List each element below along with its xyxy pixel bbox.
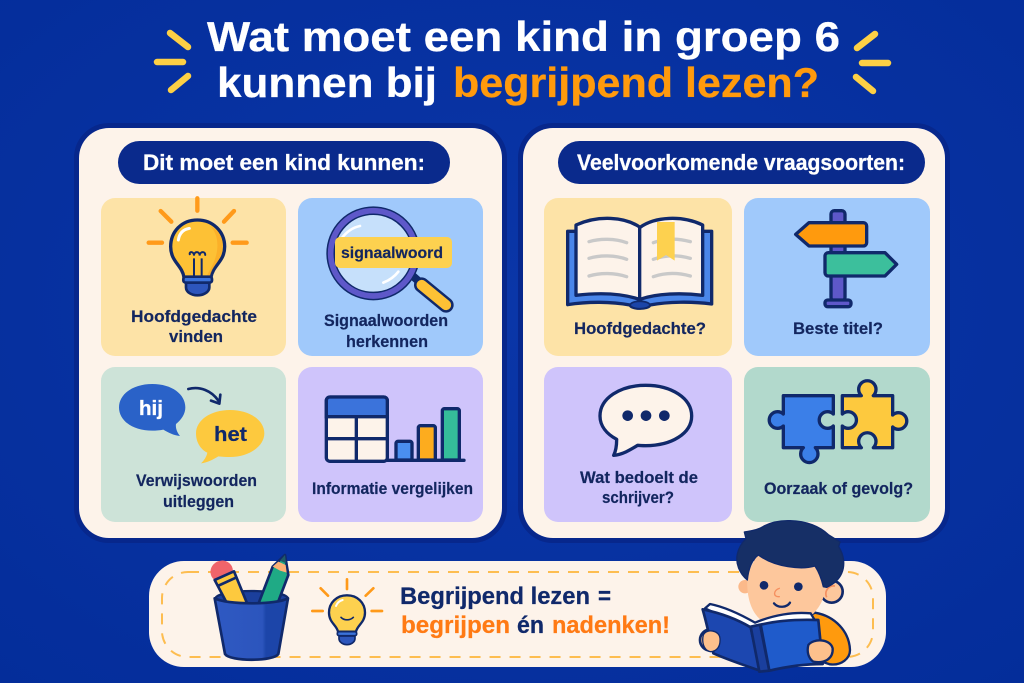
banner: begrijpend lezen bbox=[149, 521, 886, 672]
heading: dit moet een kind kunnen bbox=[118, 141, 450, 184]
card: verwijswoorden uitleggen bbox=[101, 367, 286, 522]
slogan: én bbox=[517, 612, 544, 639]
icon: sparks right of title bbox=[856, 34, 888, 91]
label bbox=[131, 307, 257, 346]
icon: signpost bbox=[796, 211, 897, 307]
title: Wat moet een kind in groep 6 bbox=[207, 13, 840, 60]
icon: table and bar chart bbox=[326, 397, 464, 461]
highlighted word: signaalwoord bbox=[341, 245, 443, 262]
card: informatie vergelijken bbox=[298, 367, 483, 522]
icon: small light bulb bbox=[312, 579, 382, 645]
word: hij: hij bbox=[139, 398, 163, 420]
highlighted word bbox=[335, 237, 452, 268]
slogan: nadenken! bbox=[552, 612, 670, 639]
icon: light bulb bbox=[149, 198, 247, 295]
label: Informatie vergelijken bbox=[312, 479, 473, 498]
title: begrijpend lezen? bbox=[453, 59, 819, 106]
panel: veelvoorkomende vraagsoorten bbox=[523, 128, 945, 538]
label: herkennen bbox=[346, 332, 428, 351]
word: het: het bbox=[214, 424, 247, 446]
icon: speech bubble with dots bbox=[600, 385, 692, 455]
slogan bbox=[400, 583, 670, 639]
icon: pencil cup bbox=[207, 555, 288, 660]
illustration: boy reading a book bbox=[700, 521, 850, 672]
icon: magnifying glass bbox=[331, 211, 446, 305]
card: oorzaak of gevolg bbox=[744, 367, 930, 522]
label: Hoofdgedachte? bbox=[574, 319, 706, 338]
icon: open book bbox=[568, 218, 712, 309]
label: uitleggen bbox=[163, 492, 234, 511]
label: Verwijswoorden bbox=[136, 471, 257, 490]
label bbox=[136, 471, 257, 511]
label bbox=[580, 468, 698, 507]
title: kunnen bij bbox=[217, 59, 437, 106]
slogan: = bbox=[598, 583, 611, 610]
label: Hoofdgedachte bbox=[131, 307, 257, 326]
heading: veelvoorkomende vraagsoorten: Veelvoorkomende vraagsoorten: bbox=[577, 150, 905, 175]
icon: sparks left of title bbox=[157, 33, 188, 90]
label: Oorzaak of gevolg? bbox=[764, 479, 913, 498]
label bbox=[324, 311, 448, 351]
title bbox=[207, 13, 840, 106]
label: vinden bbox=[169, 327, 223, 346]
card: wat bedoelt de schrijver bbox=[544, 367, 732, 522]
card: hoofdgedachte vraag bbox=[544, 198, 732, 356]
label: Beste titel? bbox=[793, 319, 883, 338]
icon: puzzle pieces bbox=[769, 381, 907, 463]
card: beste titel bbox=[744, 198, 930, 356]
slogan: begrijpen bbox=[401, 612, 510, 639]
icon: speech bubbles hij and het bbox=[119, 384, 264, 463]
heading: dit moet een kind kunnen: Dit moet een kind kunnen: bbox=[143, 150, 425, 175]
slogan: Begrijpend lezen bbox=[400, 583, 590, 610]
heading: veelvoorkomende vraagsoorten bbox=[558, 141, 925, 184]
panel: dit moet een kind kunnen bbox=[79, 128, 502, 538]
label: schrijver? bbox=[602, 488, 674, 507]
label: Signaalwoorden bbox=[324, 311, 448, 330]
label: Wat bedoelt de bbox=[580, 468, 698, 487]
card: hoofdgedachte vinden bbox=[101, 198, 286, 356]
card: signaalwoorden herkennen bbox=[298, 198, 483, 356]
